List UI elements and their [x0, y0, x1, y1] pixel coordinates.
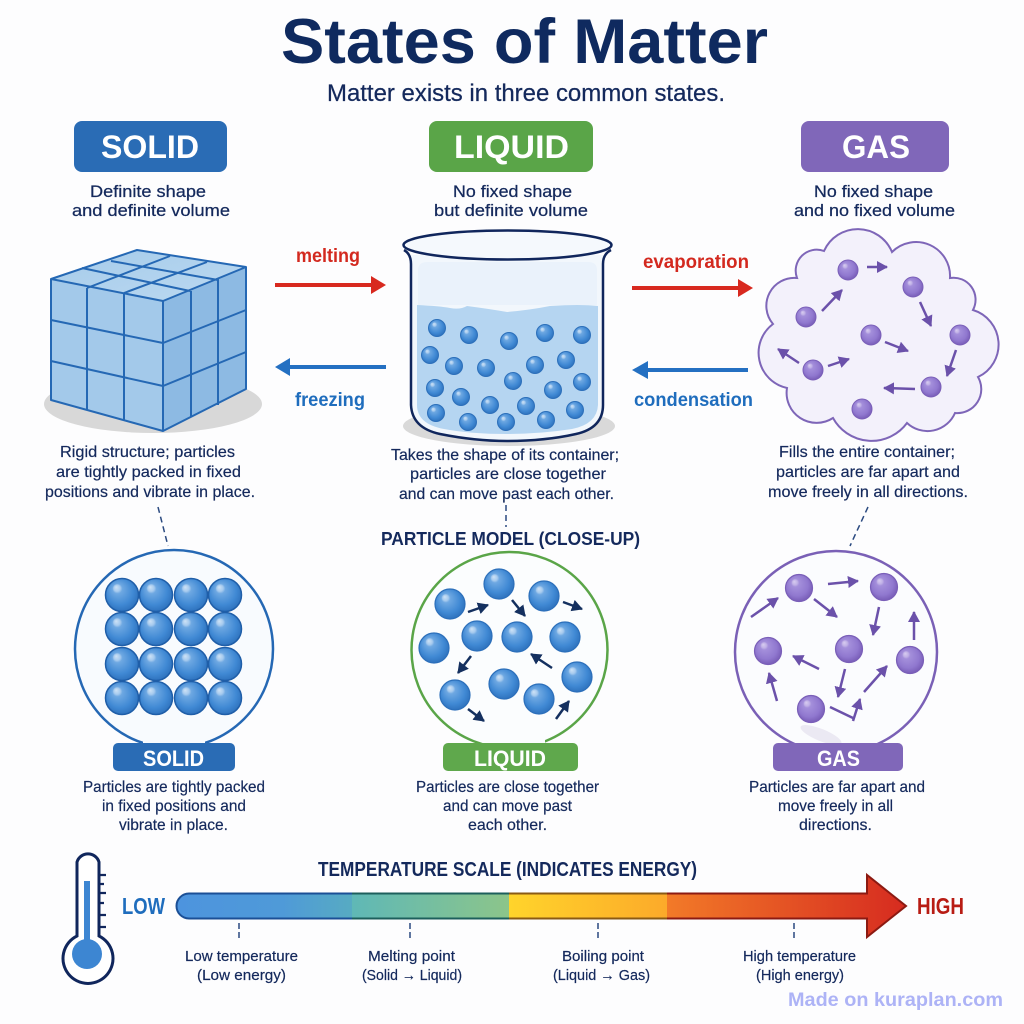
icon: thermometer — [63, 854, 113, 983]
watermark: Made on kuraplan.com — [788, 990, 1003, 1011]
gas label: GAS — [817, 746, 860, 771]
liquid particles — [419, 569, 592, 714]
gas definition: and no fixed volume — [794, 201, 955, 220]
gas caption: move freely in all — [778, 798, 893, 815]
temperature arrow bar — [176, 875, 906, 937]
scale label: boiling point: Boiling point — [562, 948, 645, 965]
panel: gas header — [794, 121, 955, 220]
text: solid description: are tightly packed in fixed — [56, 464, 241, 481]
gas label — [773, 743, 903, 771]
liquid caption: Particles are close together — [416, 779, 600, 796]
panel: gas close-up — [735, 551, 937, 834]
panel: solid header — [72, 121, 230, 220]
liquid badge — [429, 121, 593, 172]
liquid caption: each other. — [468, 817, 547, 834]
gas badge — [801, 121, 949, 172]
scale label: high temperature — [743, 948, 856, 984]
text: solid description — [45, 444, 255, 501]
scale label: high temperature: (High energy) — [756, 967, 844, 984]
text: gas description: move freely in all directions. — [768, 484, 968, 501]
liquid label — [443, 743, 578, 771]
solid caption: in fixed positions and — [102, 798, 246, 815]
gas badge: GAS — [842, 129, 910, 165]
text: gas description: Fills the entire container; — [779, 444, 955, 461]
liquid definition — [434, 182, 588, 220]
gas caption: directions. — [799, 817, 872, 834]
text: liquid description: and can move past each other. — [399, 486, 614, 503]
liquid label: LIQUID — [474, 746, 546, 771]
scale label: boiling point: (Liquid → Gas) — [553, 967, 650, 984]
icon: solid cube — [44, 250, 262, 433]
text: liquid description — [391, 447, 619, 503]
label: low: LOW — [122, 893, 165, 919]
text: solid description: positions and vibrate in place. — [45, 484, 255, 501]
arrow: freezing — [275, 358, 386, 411]
text: gas description — [768, 444, 968, 501]
scale label: boiling point — [553, 948, 650, 984]
gas definition: No fixed shape — [814, 182, 933, 201]
liquid definition: No fixed shape — [453, 182, 572, 201]
label: high: HIGH — [917, 893, 964, 919]
gas definition — [794, 182, 955, 220]
panel: liquid close-up — [412, 552, 608, 834]
panel: liquid header — [429, 121, 593, 220]
liquid circle — [412, 552, 608, 750]
scale label: melting point: (Solid → Liquid) — [362, 967, 462, 984]
text: liquid description: Takes the shape of its container; — [391, 447, 619, 464]
solid label — [113, 743, 235, 771]
arrow: condensation — [632, 361, 753, 411]
arrow: melting: melting — [296, 246, 360, 267]
solid caption: Particles are tightly packed — [83, 779, 265, 796]
solid badge — [74, 121, 227, 172]
liquid caption — [416, 779, 600, 834]
subtitle: Matter exists in three common states. — [327, 80, 725, 107]
arrow: melting — [275, 246, 386, 294]
heading: particle model: PARTICLE MODEL (CLOSE-UP) — [381, 529, 640, 549]
scale label: low temperature: (Low energy) — [197, 967, 286, 984]
liquid caption: and can move past — [443, 798, 573, 815]
solid label: SOLID — [143, 746, 204, 771]
solid definition — [72, 182, 230, 220]
solid definition: and definite volume — [72, 201, 230, 220]
arrow: freezing: freezing — [295, 390, 365, 411]
gas particles — [796, 260, 970, 419]
gas arrows — [751, 581, 914, 721]
scale label: low temperature — [185, 948, 298, 984]
icon: beaker with liquid — [403, 230, 615, 446]
panel: solid close-up — [75, 550, 273, 834]
solid particles — [106, 578, 242, 714]
solid definition: Definite shape — [90, 182, 206, 201]
gas arrows — [778, 267, 956, 389]
text: liquid description: particles are close together — [410, 466, 607, 483]
water — [417, 305, 598, 434]
liquid badge: LIQUID — [454, 129, 569, 165]
gas circle — [735, 551, 937, 753]
scale label: high temperature: High temperature — [743, 948, 856, 965]
scale label: low temperature: Low temperature — [185, 948, 298, 965]
solid caption — [83, 779, 265, 834]
gas caption: Particles are far apart and — [749, 779, 925, 796]
text: solid description: Rigid structure; particles — [60, 444, 235, 461]
solid caption: vibrate in place. — [119, 817, 228, 834]
scale label: melting point: Melting point — [368, 948, 456, 965]
arrow: evaporation — [632, 252, 753, 297]
liquid definition: but definite volume — [434, 201, 588, 220]
arrow: evaporation: evaporation — [643, 252, 749, 273]
arrow: condensation: condensation — [634, 390, 753, 411]
scale ticks — [239, 923, 794, 941]
solid circle — [75, 550, 273, 750]
gas caption — [749, 779, 925, 834]
heading: temperature scale: TEMPERATURE SCALE (INDICATES ENERGY) — [318, 859, 697, 881]
title: States of Matter — [281, 7, 768, 77]
liquid arrows — [458, 600, 582, 721]
liquid particles — [422, 320, 590, 430]
gas particles — [754, 574, 924, 722]
icon: gas cloud — [759, 229, 999, 441]
connector lines — [158, 505, 868, 546]
solid badge: SOLID — [101, 129, 199, 165]
scale label: melting point — [362, 948, 462, 984]
text: gas description: particles are far apart and — [776, 464, 960, 481]
